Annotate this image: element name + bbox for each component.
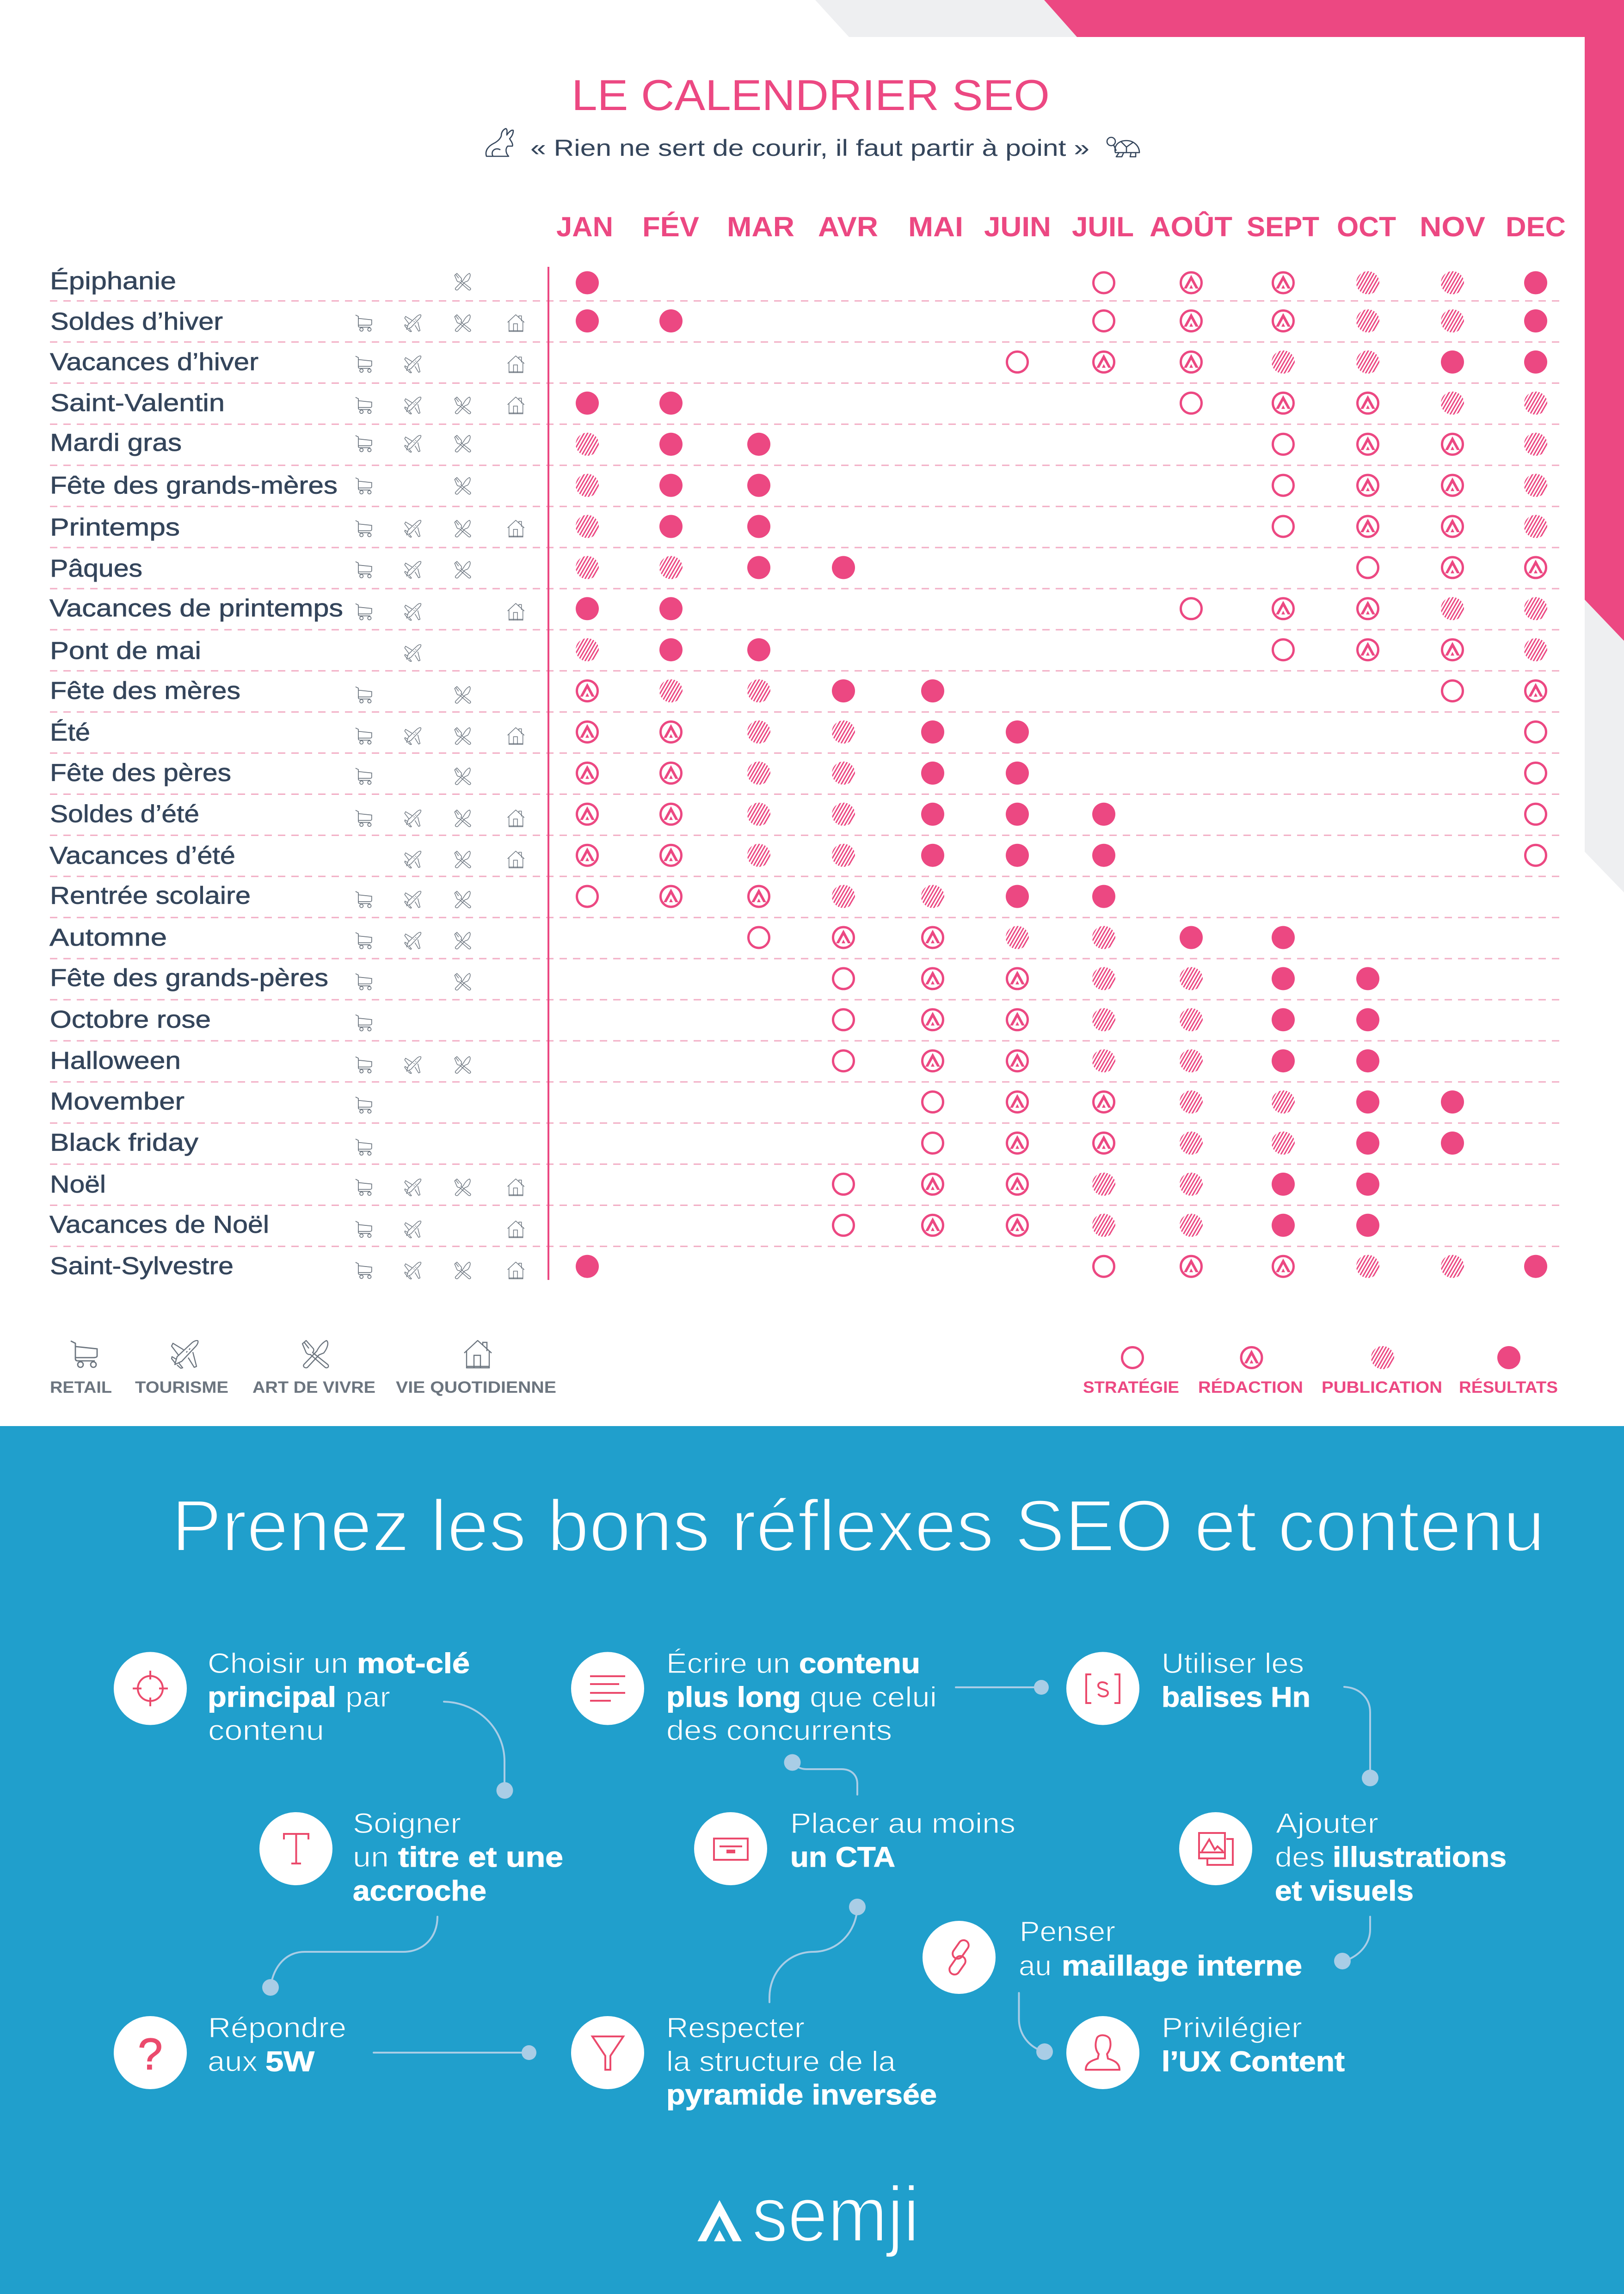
circle	[259, 1812, 332, 1885]
markers	[576, 309, 1547, 332]
icon: call to action	[714, 1839, 748, 1860]
sectors	[356, 603, 524, 621]
circle	[694, 1812, 767, 1885]
row: Épiphanie	[50, 268, 1547, 295]
sectors	[356, 435, 471, 452]
step: balises Hn	[1066, 1648, 1310, 1725]
row: Printemps	[50, 514, 1547, 541]
text: plus long	[666, 1681, 801, 1713]
legend item: résultats: RÉSULTATS	[1459, 1378, 1558, 1396]
row: Automne	[49, 924, 1295, 951]
row: Fête des pères	[50, 759, 1546, 787]
legend item: art de vivre: ART DE VIVRE	[252, 1378, 375, 1396]
label: Pâques	[50, 555, 142, 582]
text: Utiliser les	[1162, 1648, 1304, 1679]
markers	[577, 762, 1546, 785]
text: Placer au moins	[790, 1808, 1015, 1839]
text: pyramide inversée	[666, 2079, 937, 2110]
text	[1162, 2012, 1345, 2077]
icon: turtle	[1107, 137, 1139, 157]
circle	[1066, 1652, 1139, 1725]
text	[666, 1648, 937, 1746]
sectors	[405, 851, 524, 868]
logo wordmark: semji	[752, 2171, 919, 2258]
markers	[576, 433, 1547, 456]
markers	[577, 803, 1546, 826]
text: contenu	[799, 1648, 920, 1679]
markers	[833, 1049, 1379, 1072]
month headers: NOV	[1420, 211, 1485, 242]
arrow: step 2 to 3	[262, 1917, 437, 1996]
label: Octobre rose	[50, 1006, 211, 1033]
label: Fête des pères	[50, 759, 231, 787]
text: illustrations	[1333, 1841, 1507, 1873]
legend item: retail: RETAIL	[50, 1378, 112, 1396]
label: Vacances d’été	[49, 842, 235, 869]
row: Vacances de Noël	[49, 1211, 1379, 1238]
markers	[748, 926, 1295, 949]
row: Saint-Valentin	[50, 389, 1547, 417]
row: Soldes d’été	[50, 800, 1546, 828]
legend item: publication	[1322, 1346, 1442, 1396]
arrow: step 5 to 6	[784, 1754, 857, 1795]
sectors	[356, 1057, 471, 1074]
text: balises Hn	[1162, 1681, 1310, 1713]
sectors	[356, 1139, 372, 1155]
markers	[577, 720, 1546, 744]
label: Halloween	[50, 1047, 181, 1075]
markers	[576, 474, 1547, 497]
legend item: vie quotidienne: VIE QUOTIDIENNE	[396, 1378, 556, 1396]
arrow: step 1 to 2	[444, 1702, 513, 1799]
markers	[833, 1214, 1379, 1237]
heading: réflexes: Prenez les bons réflexes SEO et contenu	[172, 1485, 1545, 1567]
panel: blue section	[0, 1426, 1624, 2294]
markers	[577, 679, 1546, 702]
row: Fête des mères	[50, 677, 1546, 705]
row: Soldes d’hiver	[50, 308, 1547, 335]
text: un	[353, 1841, 389, 1873]
sectors	[356, 1262, 524, 1279]
markers	[576, 597, 1547, 620]
markers	[922, 1090, 1464, 1113]
icon: question mark: ?	[138, 2030, 163, 2079]
text	[1275, 1808, 1507, 1907]
label: Soldes d’été	[50, 800, 199, 828]
label: Saint-Valentin	[50, 389, 225, 417]
label: Vacances d’hiver	[50, 349, 258, 376]
row: Mardi gras	[50, 429, 1547, 456]
sectors	[356, 687, 471, 703]
icon: target	[133, 1671, 168, 1706]
step: UX Content	[1066, 2012, 1345, 2089]
text: Penser	[1020, 1916, 1115, 1947]
markers	[922, 1132, 1464, 1155]
row: Été	[50, 719, 1546, 746]
step: maillage interne	[923, 1916, 1302, 1994]
label: Saint-Sylvestre	[50, 1252, 234, 1279]
arrow: step 3 to 4	[374, 2045, 536, 2060]
text	[353, 1808, 563, 1907]
label: Pont de mai	[50, 637, 201, 664]
sectors	[356, 1097, 372, 1113]
decoration: top grey band	[815, 0, 1077, 37]
icon: bracket S	[1086, 1674, 1120, 1703]
label: Épiphanie	[50, 268, 176, 295]
sectors	[356, 1221, 524, 1238]
icon: images	[1199, 1833, 1233, 1865]
legend item: tourisme: TOURISME	[135, 1378, 228, 1396]
row: Fête des grands-mères	[50, 472, 1547, 499]
row: Vacances d’été	[49, 842, 1546, 869]
text	[1162, 1648, 1310, 1713]
text: des	[1275, 1841, 1325, 1873]
label: Printemps	[50, 514, 180, 541]
icon: text lines	[590, 1676, 625, 1701]
text: Soigner	[353, 1808, 461, 1839]
label: Noël	[50, 1171, 106, 1198]
month headers: AVR	[818, 211, 878, 242]
arrow: step 4 to 5	[769, 1899, 866, 2002]
sectors	[405, 645, 421, 662]
markers	[577, 844, 1546, 867]
row: Vacances d’hiver	[50, 349, 1547, 376]
text	[208, 1648, 470, 1746]
sectors	[356, 728, 524, 744]
logo mark	[697, 2200, 742, 2241]
legend item: vie quotidienne	[396, 1341, 556, 1396]
text: aux	[208, 2046, 258, 2077]
legend: sectors	[50, 1341, 556, 1396]
text: maillage interne	[1062, 1950, 1302, 1981]
month headers: JUIL	[1072, 211, 1134, 242]
text: et visuels	[1275, 1875, 1414, 1907]
label: Fête des grands-mères	[50, 472, 338, 499]
sectors	[356, 356, 524, 373]
legend item: rédaction	[1198, 1347, 1303, 1396]
label: Été	[50, 719, 90, 746]
step: CTA	[694, 1808, 1015, 1885]
text: Privilégier	[1162, 2012, 1302, 2043]
row: Pont de mai	[50, 637, 1547, 664]
step: illustrations	[1179, 1808, 1507, 1907]
markers	[576, 271, 1547, 294]
text: un CTA	[790, 1841, 895, 1873]
text: Choisir un	[208, 1648, 348, 1679]
row: Rentrée scolaire	[50, 882, 1115, 910]
label: Fête des grands-pères	[50, 965, 328, 992]
legend item: rédaction: RÉDACTION	[1198, 1378, 1303, 1396]
text: mot-clé	[357, 1648, 470, 1679]
text: principal	[208, 1681, 336, 1713]
month headers: MAI	[908, 211, 963, 242]
markers	[1007, 351, 1547, 374]
text: 5W	[265, 2046, 314, 2077]
sectors	[356, 561, 471, 578]
text: au	[1019, 1950, 1052, 1981]
icon: rabbit	[486, 129, 513, 156]
row: Movember	[50, 1088, 1464, 1115]
arrow: step 6 to 7	[956, 1680, 1049, 1695]
step: mot-clé principal	[114, 1648, 470, 1746]
sectors	[356, 973, 471, 990]
month headers: MAR	[727, 211, 794, 242]
text: Répondre	[208, 2012, 346, 2043]
month headers: SEPT	[1247, 211, 1319, 242]
text	[1019, 1916, 1302, 1981]
sectors	[455, 273, 471, 290]
text: que celui	[810, 1681, 937, 1713]
text	[666, 2012, 937, 2110]
icon: chain link	[942, 1938, 976, 1976]
circle	[114, 1652, 187, 1725]
vertical axis line	[547, 267, 549, 1280]
sectors	[356, 932, 471, 949]
label: Soldes d’hiver	[50, 308, 223, 335]
sectors	[356, 891, 471, 908]
markers	[833, 1173, 1379, 1196]
text	[790, 1808, 1015, 1873]
label: Black friday	[50, 1129, 199, 1156]
label: Fête des mères	[50, 677, 240, 705]
label: Movember	[50, 1088, 185, 1115]
label: Mardi gras	[50, 429, 182, 456]
icon: T	[284, 1834, 308, 1863]
text	[208, 2012, 346, 2077]
label: Vacances de printemps	[49, 595, 343, 622]
subtitle: « Rien ne sert de courir, il faut partir à point »	[530, 135, 1089, 161]
step: pyramide inversée	[571, 2012, 937, 2110]
markers	[833, 1008, 1379, 1031]
icon: user	[1086, 2035, 1120, 2070]
sectors	[356, 810, 524, 827]
sectors	[356, 1015, 372, 1031]
step: 5W	[114, 2012, 346, 2089]
row: Black friday	[50, 1129, 1464, 1156]
sectors	[356, 315, 524, 332]
legend item: stratégie	[1083, 1347, 1179, 1396]
markers	[576, 392, 1547, 415]
legend item: retail	[50, 1341, 112, 1396]
row: Pâques	[50, 555, 1546, 582]
circle	[1179, 1812, 1252, 1885]
text: la structure de la	[666, 2046, 896, 2077]
legend item: tourisme	[135, 1341, 228, 1396]
month headers: JAN	[556, 211, 613, 242]
circle	[571, 1652, 644, 1725]
month headers: AOÛT	[1150, 211, 1232, 242]
month headers: FÉV	[642, 211, 699, 242]
circle	[1066, 2016, 1139, 2089]
icon: funnel	[592, 2036, 623, 2070]
circle	[923, 1921, 996, 1994]
markers	[576, 556, 1546, 579]
step: titre et accroche	[259, 1808, 563, 1907]
label: Automne	[49, 924, 167, 951]
month headers: JUIN	[984, 211, 1051, 242]
arrow: step 9 to 10	[1019, 1993, 1053, 2060]
text: l’UX Content	[1162, 2046, 1345, 2077]
row: Halloween	[50, 1047, 1379, 1075]
legend item: stratégie: STRATÉGIE	[1083, 1378, 1179, 1396]
markers	[576, 638, 1547, 661]
month headers	[556, 211, 1566, 242]
sectors	[356, 397, 524, 414]
sectors	[356, 1179, 524, 1196]
markers	[833, 967, 1379, 990]
arrow: step 7 to 8	[1344, 1687, 1378, 1786]
sectors	[356, 768, 471, 785]
text: Respecter	[666, 2012, 805, 2043]
text: Ajouter	[1276, 1808, 1378, 1839]
month headers: OCT	[1337, 211, 1396, 242]
decoration: pink corner band	[1044, 0, 1624, 641]
legend item: publication: PUBLICATION	[1322, 1378, 1442, 1396]
sectors	[356, 478, 471, 494]
text: des concurrents	[666, 1715, 892, 1746]
decoration: right grey band	[1585, 600, 1624, 892]
logo: semji	[697, 2171, 919, 2258]
text: contenu	[208, 1715, 324, 1746]
row: Vacances de printemps	[49, 595, 1547, 622]
row: Fête des grands-pères	[50, 965, 1379, 992]
sectors	[356, 520, 524, 537]
title: LE CALENDRIER SEO	[572, 71, 1050, 119]
text: Écrire un	[666, 1648, 790, 1679]
month headers: DEC	[1506, 211, 1566, 242]
legend item: résultats	[1459, 1346, 1558, 1396]
text: titre et une	[398, 1841, 563, 1873]
circle	[571, 2016, 644, 2089]
legend: phases	[1083, 1346, 1558, 1396]
step: contenu plus long	[571, 1648, 937, 1746]
row: Octobre rose	[50, 1006, 1379, 1033]
text: accroche	[353, 1875, 486, 1907]
markers	[577, 885, 1115, 908]
legend item: art de vivre	[252, 1341, 375, 1396]
markers	[576, 1255, 1547, 1278]
row: Noël	[50, 1171, 1379, 1198]
circle	[114, 2016, 187, 2089]
text: par	[345, 1681, 390, 1713]
label: Vacances de Noël	[49, 1211, 269, 1238]
markers	[576, 515, 1547, 538]
label: Rentrée scolaire	[50, 882, 251, 910]
row: Saint-Sylvestre	[50, 1252, 1547, 1279]
arrow: step 8 to 9	[1334, 1917, 1370, 1969]
